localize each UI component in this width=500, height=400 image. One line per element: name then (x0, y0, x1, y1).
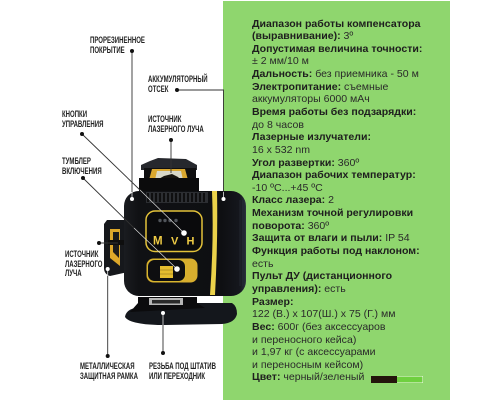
text block: specifications: (выравнивание): 3º (252, 30, 353, 42)
text block: specifications: Диапазон рабочих температур: (252, 169, 416, 181)
label: metal protective frame: ЗАЩИТНАЯ РАМКА (80, 370, 138, 380)
text block: specifications: Пульт ДУ (дистанционного (252, 270, 392, 282)
text block: specifications: поворота: 360º (252, 220, 329, 232)
label: laser source top: ИСТОЧНИК (148, 114, 181, 124)
label: power toggle: ТУМБЛЕР (62, 156, 91, 166)
text block: specifications: и переносного кейса) (252, 334, 356, 346)
label: laser source left: ИСТОЧНИК (65, 249, 98, 259)
base plate (125, 297, 237, 325)
label: laser source left: ЛУЧА (65, 268, 82, 278)
label: battery compartment: АККУМУЛЯТОРНЫЙ (148, 74, 208, 84)
control panel with M V H buttons (146, 211, 202, 252)
text block: specifications: Механизм точной регулировки (252, 207, 413, 219)
label: control buttons (62, 109, 104, 128)
power switch (146, 258, 198, 282)
text block: specifications: и 1,97 кг (с аксессуарами (252, 346, 376, 358)
text block: specifications: Функция работы под наклоном: (252, 245, 420, 257)
label: laser source left (65, 249, 102, 278)
label: metal protective frame: МЕТАЛЛИЧЕСКАЯ (80, 361, 135, 371)
top laser turret (139, 158, 199, 192)
label: power toggle (62, 156, 102, 176)
label: tripod thread: РЕЗЬБА ПОД ШТАТИВ (149, 361, 216, 371)
label: control buttons: УПРАВЛЕНИЯ (62, 118, 103, 128)
label: battery compartment (148, 74, 208, 94)
label: tripod thread: ИЛИ ПЕРЕХОДНИК (149, 370, 205, 380)
control panel with M V H buttons: H (186, 236, 194, 248)
text block: specifications: Размер: (252, 296, 294, 308)
text block: specifications: 16 x 532 nm (252, 144, 310, 156)
label: rubberized coating (90, 35, 145, 54)
icon: colour swatch black and green (371, 376, 423, 383)
label: rubberized coating: ПОКРЫТИЕ (90, 44, 125, 54)
label: laser source top: ЛАЗЕРНОГО ЛУЧА (148, 124, 204, 134)
text block: specifications: Диапазон работы компенсатора (252, 18, 421, 30)
control panel with M V H buttons: M (153, 236, 163, 248)
text block: specifications: Угол развертки: 360º (252, 157, 359, 169)
left laser window frame (104, 220, 128, 276)
text block: specifications: ± 2 мм/10 м (252, 55, 309, 67)
main body (124, 191, 246, 296)
text block: specifications: Вес: 600г (без аксессуаров (252, 321, 386, 333)
text block: specifications: 122 (В.) x 107(Ш.) x 75 (Г.) мм (252, 308, 395, 320)
control panel with M V H buttons: V (171, 236, 179, 248)
label: battery compartment: ОТСЕК (148, 84, 168, 94)
label: metal protective frame (80, 361, 138, 381)
text block: specifications: аккумуляторы 6000 мАч (252, 93, 370, 105)
label: rubberized coating: ПРОРЕЗИНЕННОЕ (90, 35, 145, 45)
label: tripod thread (149, 361, 216, 381)
text block: specifications: Дальность: без приемника - 50 м (252, 68, 419, 80)
text block: specifications: Защита от влаги и пыли: IP 54 (252, 232, 410, 244)
text block: specifications: до 8 часов (252, 119, 304, 131)
text block: specifications: Допустимая величина точности: (252, 43, 422, 55)
text block: specifications: Класс лазера: 2 (252, 194, 334, 206)
label: laser source top (148, 114, 204, 134)
text block: specifications: Цвет: черный/зеленый (252, 371, 364, 383)
label: power toggle: ВКЛЮЧЕНИЯ (62, 166, 102, 176)
text block: specifications: управления): есть (252, 283, 346, 295)
text block: specifications: -10 ºC...+45 ºC (252, 182, 323, 194)
text block: specifications: Лазерные излучатели: (252, 131, 371, 143)
leader lines (80, 49, 226, 358)
text block: specifications: есть (252, 258, 273, 270)
text block: specifications (252, 18, 422, 383)
panel: specifications background (223, 1, 450, 400)
text block: specifications: и переносным кейсом) (252, 359, 363, 371)
label: control buttons: КНОПКИ (62, 109, 87, 119)
text block: specifications: Время работы без подзарядки: (252, 106, 416, 118)
text block: specifications: Электропитание: съемные (252, 81, 388, 93)
label: laser source left: ЛАЗЕРНОГО (65, 258, 102, 268)
